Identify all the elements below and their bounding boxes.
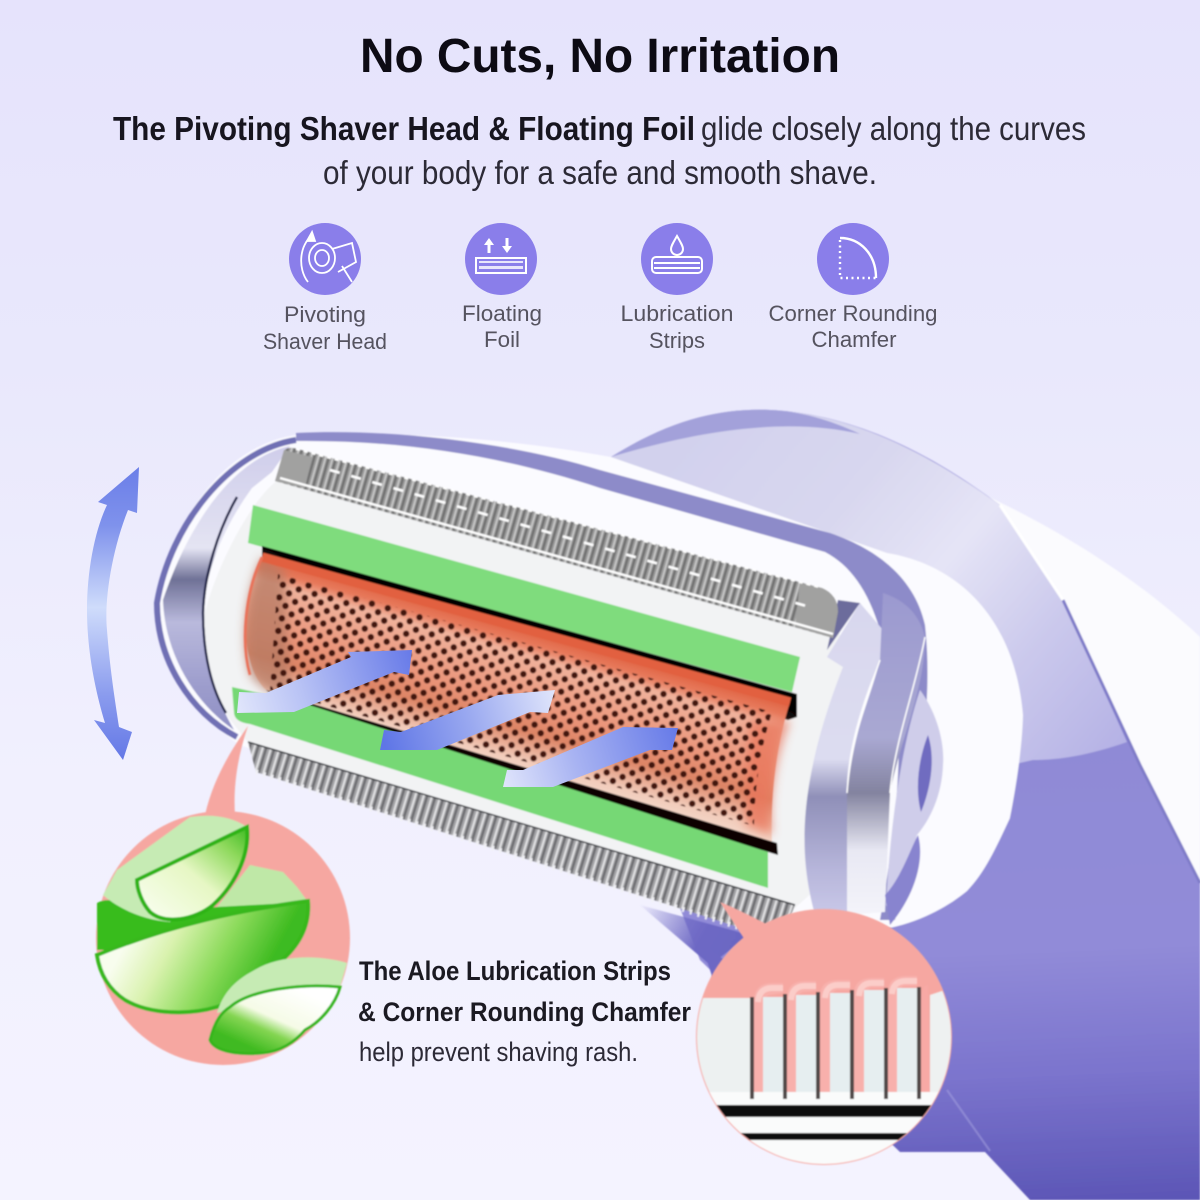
icon: floating foil [465, 223, 537, 295]
label: lubrication strips [620, 301, 734, 353]
label: corner rounding chamfer [768, 301, 938, 352]
inner white frame [205, 480, 860, 908]
black slot bottom [266, 690, 778, 855]
label: lubrication strips: Lubrication [620, 301, 734, 326]
callout: aloe circle [96, 726, 350, 1065]
arrow: floating direction three [503, 727, 678, 787]
arrow: pivot direction [87, 467, 139, 760]
label: lubrication strips: Strips [649, 328, 705, 353]
top aloe strip [248, 505, 800, 692]
subtitle text block: The Pivoting Shaver Head & Floating Foil [113, 110, 695, 147]
label: corner rounding chamfer: Chamfer [812, 327, 896, 352]
label: corner rounding chamfer: Corner Rounding [768, 301, 938, 326]
copper foil [245, 557, 790, 845]
black slot top [262, 546, 797, 720]
callout: chamfer close-up circle [690, 902, 960, 1182]
label: floating foil [462, 301, 542, 352]
label: pivoting shaver head: Shaver Head [263, 329, 387, 354]
arrow: floating direction two [380, 690, 555, 750]
caption text block: help prevent shaving rash. [359, 1037, 638, 1067]
aloe slice: big middle [97, 865, 308, 1012]
icon: lubrication strips [641, 223, 713, 295]
caption text block: The Aloe Lubrication Strips [359, 956, 671, 986]
aloe slice: top [103, 816, 247, 922]
left silver band [163, 446, 290, 730]
lower aloe strip [232, 687, 768, 888]
caption text block: & Corner Rounding Chamfer [358, 997, 691, 1027]
label: floating foil: Floating [462, 301, 542, 326]
top comb blade [275, 448, 838, 638]
pivot knob [885, 690, 943, 925]
shaver head shell [157, 432, 1023, 930]
icon: pivoting shaver head [289, 223, 361, 295]
label: floating foil: Foil [484, 327, 520, 352]
comb teeth [750, 976, 960, 1099]
shaver handle [600, 410, 1200, 1200]
label: pivoting shaver head: Pivoting [284, 302, 366, 327]
right silver bands [805, 593, 925, 915]
caption text block [358, 956, 691, 1067]
feature icons row [263, 223, 938, 354]
lower comb blade [248, 742, 795, 930]
subtitle text block: of your body for a safe and smooth shave. [323, 154, 877, 191]
title: No Cuts, No Irritation [360, 30, 840, 83]
icon: corner rounding chamfer [817, 223, 889, 295]
label: pivoting shaver head [263, 302, 387, 354]
aloe slice: front [210, 957, 347, 1054]
subtitle text block: glide closely along the curves [701, 110, 1086, 147]
subtitle text block [113, 110, 1086, 191]
arrow: floating direction one [237, 650, 412, 713]
shaver illustration [157, 410, 1200, 1200]
